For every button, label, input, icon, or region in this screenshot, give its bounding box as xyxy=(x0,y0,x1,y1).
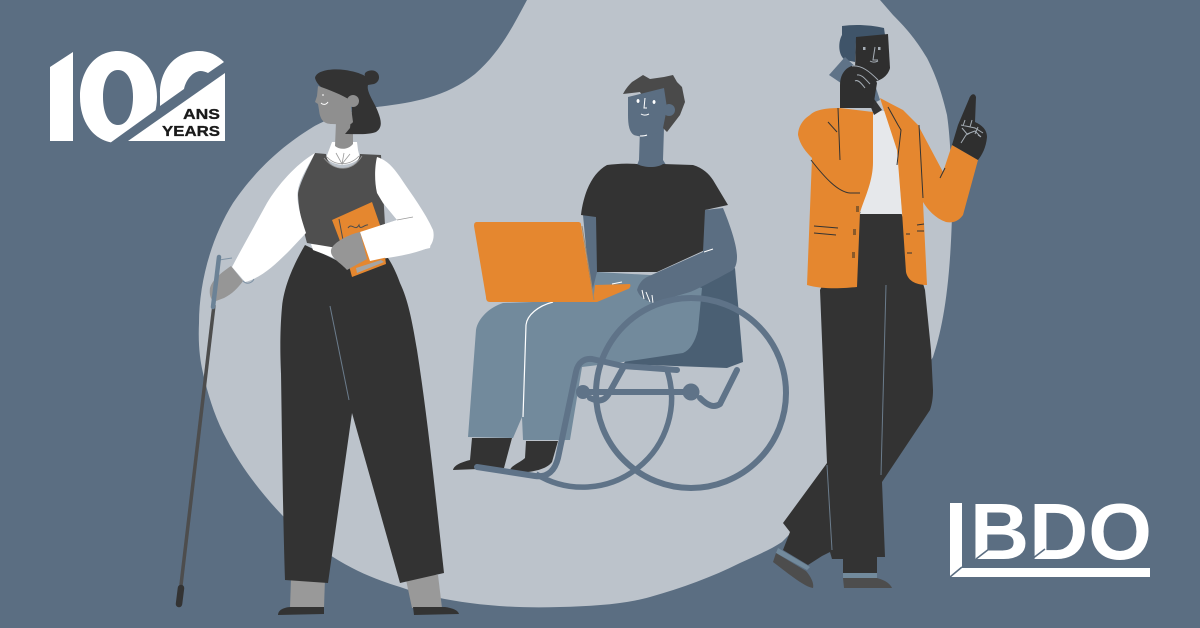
left sleeve xyxy=(232,153,315,282)
eye and smile xyxy=(321,94,328,104)
trousers xyxy=(280,245,444,583)
laptop keyboard xyxy=(593,284,630,302)
jacket lines xyxy=(811,107,945,253)
shirt xyxy=(860,110,902,214)
right sleeve upper xyxy=(360,157,434,260)
finger lines and face details xyxy=(852,47,878,88)
cane tip xyxy=(179,588,181,604)
woman with white cane xyxy=(179,69,459,615)
underline bar xyxy=(950,503,1150,577)
trousers xyxy=(783,212,933,573)
logo: BDO xyxy=(950,487,1152,577)
cuffs xyxy=(776,548,877,578)
man on phone xyxy=(773,25,987,588)
wordmark: BDO xyxy=(970,487,1152,576)
ear xyxy=(663,104,675,116)
legs: right sock xyxy=(405,575,442,608)
wheelchair frame xyxy=(477,359,737,476)
vest xyxy=(298,153,385,248)
front wheel arc xyxy=(536,370,672,487)
sleeve crease xyxy=(397,217,413,220)
shoes xyxy=(773,553,892,588)
right shoe xyxy=(413,607,459,615)
laptop hinge and highlight xyxy=(582,226,594,300)
left shoe xyxy=(278,607,324,615)
eyes xyxy=(637,99,656,104)
neck and face xyxy=(335,122,353,149)
cane xyxy=(181,305,214,585)
light blob shape xyxy=(199,0,952,607)
hair xyxy=(623,75,685,132)
knuckle lines xyxy=(961,120,983,143)
face xyxy=(315,86,353,125)
white triangle xyxy=(128,73,225,141)
blouse hem xyxy=(311,244,335,258)
wheel hub xyxy=(682,384,700,400)
trouser crease xyxy=(330,306,349,400)
phone xyxy=(829,57,880,104)
jacket right panel and arm xyxy=(880,98,978,285)
book xyxy=(332,202,386,277)
t-shirt xyxy=(581,164,728,272)
right arm xyxy=(637,208,737,303)
face xyxy=(628,88,667,136)
neck xyxy=(870,96,882,115)
hand on book xyxy=(331,232,367,270)
digit 1 xyxy=(50,52,73,141)
cane handle xyxy=(213,257,219,307)
eyes xyxy=(863,47,880,50)
jacket xyxy=(798,108,873,288)
face xyxy=(855,34,890,82)
digit 0 fragment xyxy=(160,51,224,106)
face details xyxy=(640,98,649,136)
digit 0 xyxy=(80,51,157,143)
big wheel xyxy=(596,298,786,488)
legs: left sock xyxy=(290,578,325,608)
hand on cane xyxy=(210,266,243,301)
label: ans: ANS xyxy=(183,107,220,123)
man in wheelchair xyxy=(453,75,786,488)
trouser seam xyxy=(523,302,553,417)
cord loop xyxy=(219,258,254,283)
pointing hand xyxy=(952,94,987,160)
hand holding phone xyxy=(840,65,877,108)
buttons xyxy=(852,206,859,258)
hair xyxy=(839,25,885,62)
logo: 100 ans years xyxy=(50,51,225,143)
neck xyxy=(636,128,668,168)
hand lines xyxy=(642,249,713,303)
boots xyxy=(453,438,512,470)
book scribble xyxy=(339,219,368,240)
hair xyxy=(315,69,381,134)
left arm xyxy=(583,215,632,290)
collar lines xyxy=(324,153,362,168)
laptop screen xyxy=(474,222,594,302)
leg crease xyxy=(827,285,886,550)
chair back xyxy=(623,268,743,368)
ear xyxy=(347,95,359,107)
collar xyxy=(326,142,360,165)
rear hub xyxy=(576,385,590,399)
trousers xyxy=(468,272,702,440)
forearm sleeve over book xyxy=(360,216,433,261)
boot right xyxy=(510,441,558,472)
book page edge xyxy=(356,260,384,273)
label: years: YEARS xyxy=(162,124,220,140)
